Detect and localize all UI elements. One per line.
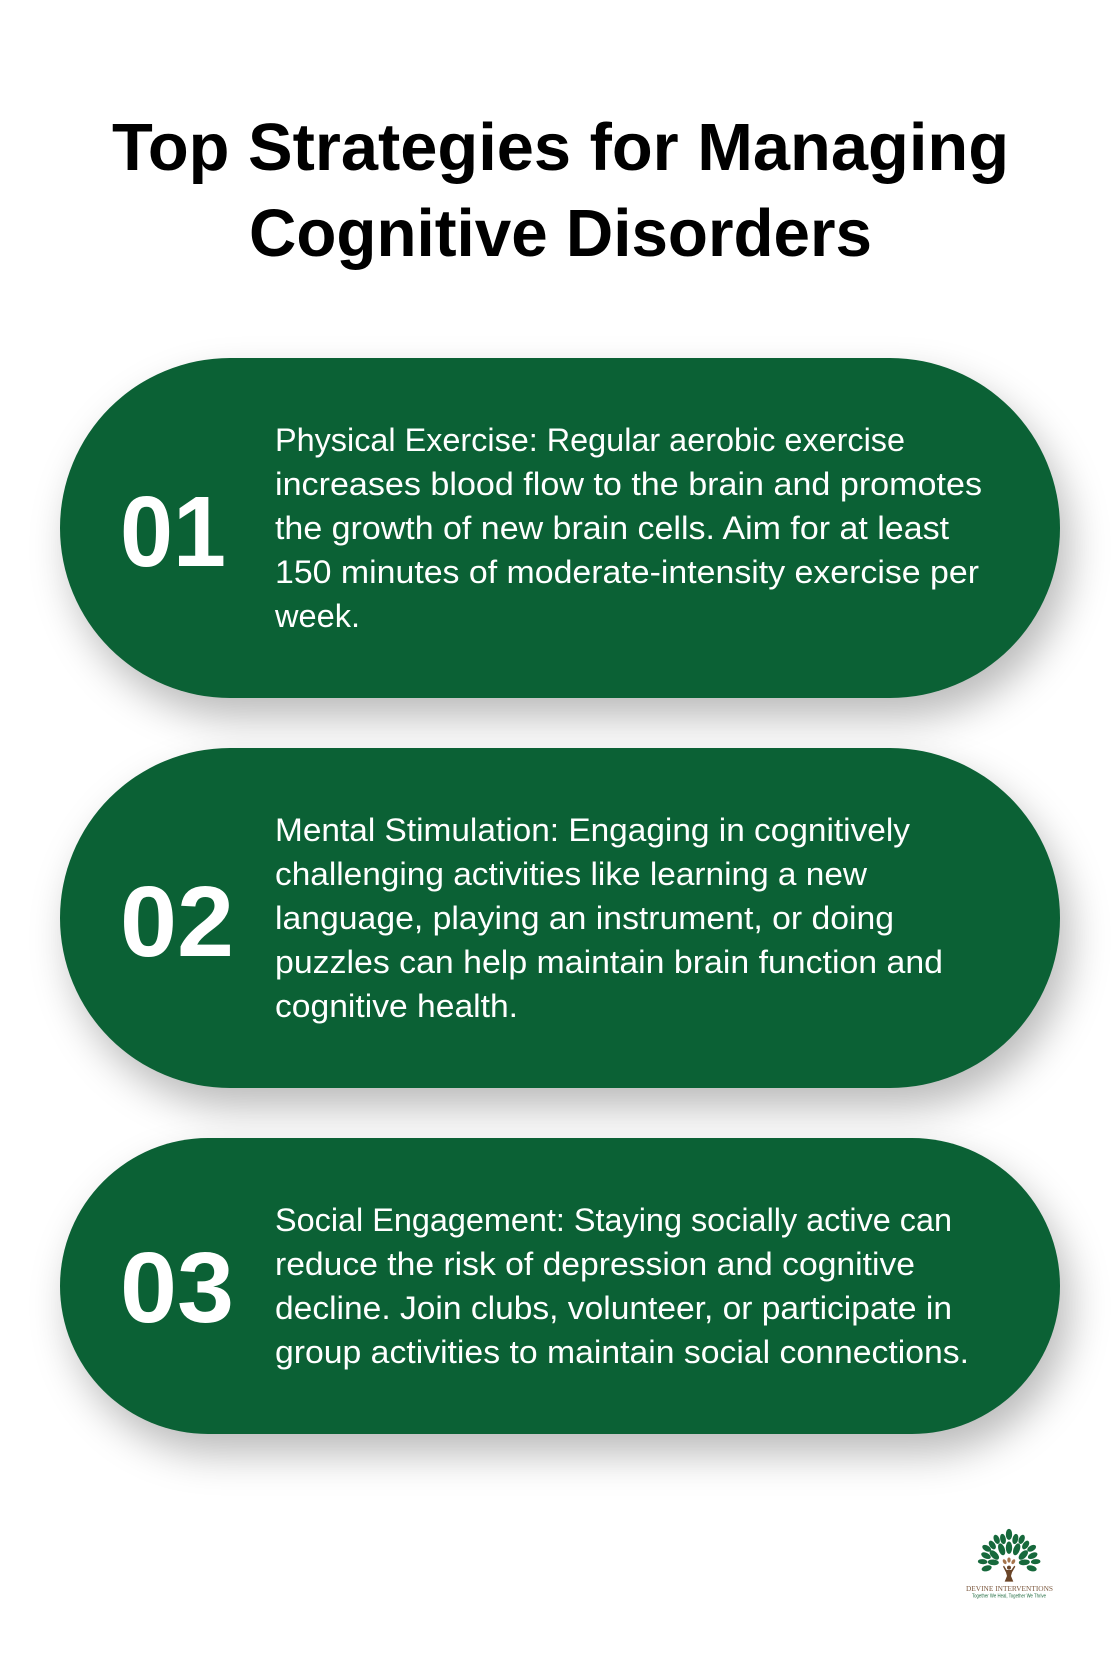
panel: step 03 social engagement: [60, 1138, 1060, 1434]
number 03: 03: [120, 1232, 234, 1344]
panel: step 01 physical exercise: [60, 358, 1060, 698]
text: mental stimulation: challenging activities like learning a new: [275, 856, 868, 892]
text: physical exercise: week.: [274, 598, 360, 634]
number 01: 01: [120, 476, 226, 588]
text: physical exercise: the growth of new brain cells. Aim for at least: [275, 510, 949, 546]
logo wordmark: DEVINE INTERVENTIONS: [966, 1584, 1053, 1593]
text: social engagement: Social Engagement: Staying socially active can: [275, 1202, 952, 1238]
text: physical exercise: [274, 422, 982, 634]
text: social engagement: group activities to maintain social connections.: [275, 1334, 969, 1370]
text: physical exercise: 150 minutes of moderate-intensity exercise per: [275, 554, 979, 590]
title: [112, 110, 1009, 271]
text: physical exercise: Physical Exercise: Regular aerobic exercise: [275, 422, 905, 458]
text: social engagement: decline. Join clubs, volunteer, or participate in: [275, 1290, 952, 1326]
text: mental stimulation: language, playing an instrument, or doing: [275, 900, 894, 936]
text: social engagement: reduce the risk of depression and cognitive: [275, 1246, 915, 1282]
text: mental stimulation: puzzles can help maintain brain function and: [275, 944, 943, 980]
title: Cognitive Disorders: [249, 196, 872, 271]
text: physical exercise: increases blood flow to the brain and promotes: [275, 466, 982, 502]
text: social engagement: [275, 1202, 969, 1370]
text: mental stimulation: cognitive health.: [275, 988, 518, 1024]
text: mental stimulation: Mental Stimulation: Engaging in cognitively: [275, 812, 910, 848]
text: mental stimulation: [275, 812, 943, 1024]
number 02: 02: [120, 866, 234, 978]
panel: step 02 mental stimulation: [60, 748, 1060, 1088]
icon: tree: [978, 1529, 1040, 1582]
logo tagline: Together We Heal, Together We Thrive: [972, 1594, 1046, 1600]
title: Top Strategies for Managing: [112, 110, 1009, 185]
